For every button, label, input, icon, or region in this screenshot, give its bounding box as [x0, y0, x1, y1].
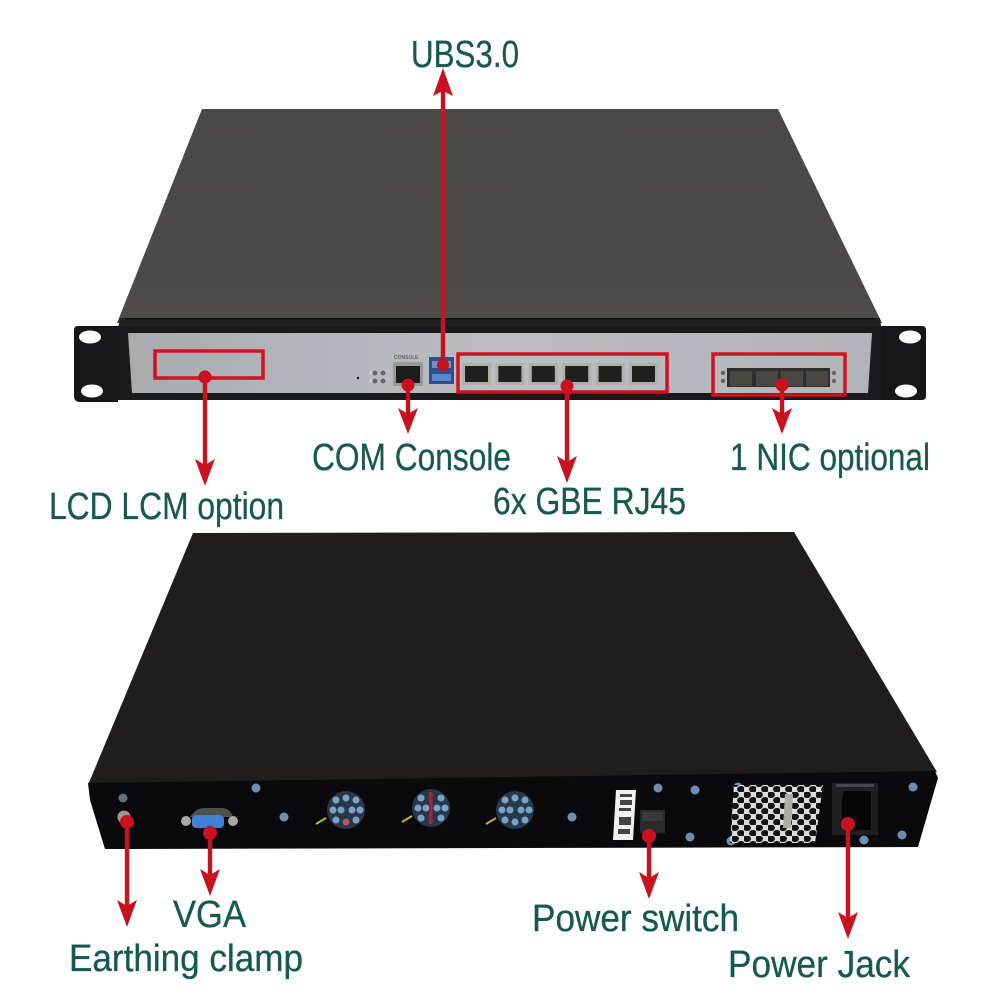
arrow: earthing [117, 815, 137, 927]
rear panel [88, 771, 938, 849]
rear top cover [88, 532, 937, 785]
status LEDs [357, 371, 385, 383]
right rack ear [878, 326, 926, 400]
left rack ear [74, 326, 118, 402]
label: Power Jack: Power Jack [728, 944, 911, 986]
yellow fan wires [316, 816, 496, 824]
SFP cages [721, 368, 836, 387]
arrow: NIC [772, 378, 792, 434]
rear view device [88, 532, 938, 849]
label: VGA: VGA [173, 894, 247, 936]
console port [393, 355, 423, 386]
PSU vent [730, 785, 823, 843]
earthing stud [118, 810, 130, 824]
arrow: RJ45 [557, 380, 577, 483]
USB port [429, 357, 454, 384]
front lip [117, 318, 882, 334]
label: Power switch: Power switch [532, 898, 739, 940]
power inlet [832, 783, 878, 835]
screws [118, 782, 918, 846]
VGA connector [181, 808, 238, 828]
arrow: power switch [639, 829, 659, 899]
power switch [640, 810, 665, 833]
barcode label [613, 790, 636, 840]
top cover [117, 109, 882, 323]
fan grilles [327, 789, 534, 829]
silver face plate [128, 333, 872, 393]
front bezel [117, 326, 882, 400]
arrow: LCD [195, 370, 215, 486]
arrow: VGA [200, 826, 220, 896]
console port: CONSOLE [394, 355, 419, 361]
label: LCD LCM option: LCD LCM option [49, 486, 284, 528]
front view device [74, 109, 926, 402]
label: 1 NIC optional: 1 NIC optional [730, 437, 930, 479]
label: 6x GBE RJ45: 6x GBE RJ45 [493, 481, 686, 523]
red highlight boxes [155, 351, 845, 395]
arrow: USB [433, 68, 453, 371]
RJ45 ports [462, 363, 658, 385]
label: COM Console: COM Console [312, 437, 511, 479]
label: UBS3.0: UBS3.0 [411, 34, 519, 76]
arrow: power jack [838, 817, 858, 939]
label: Earthing clamp: Earthing clamp [69, 938, 303, 980]
arrow: console [398, 378, 418, 434]
